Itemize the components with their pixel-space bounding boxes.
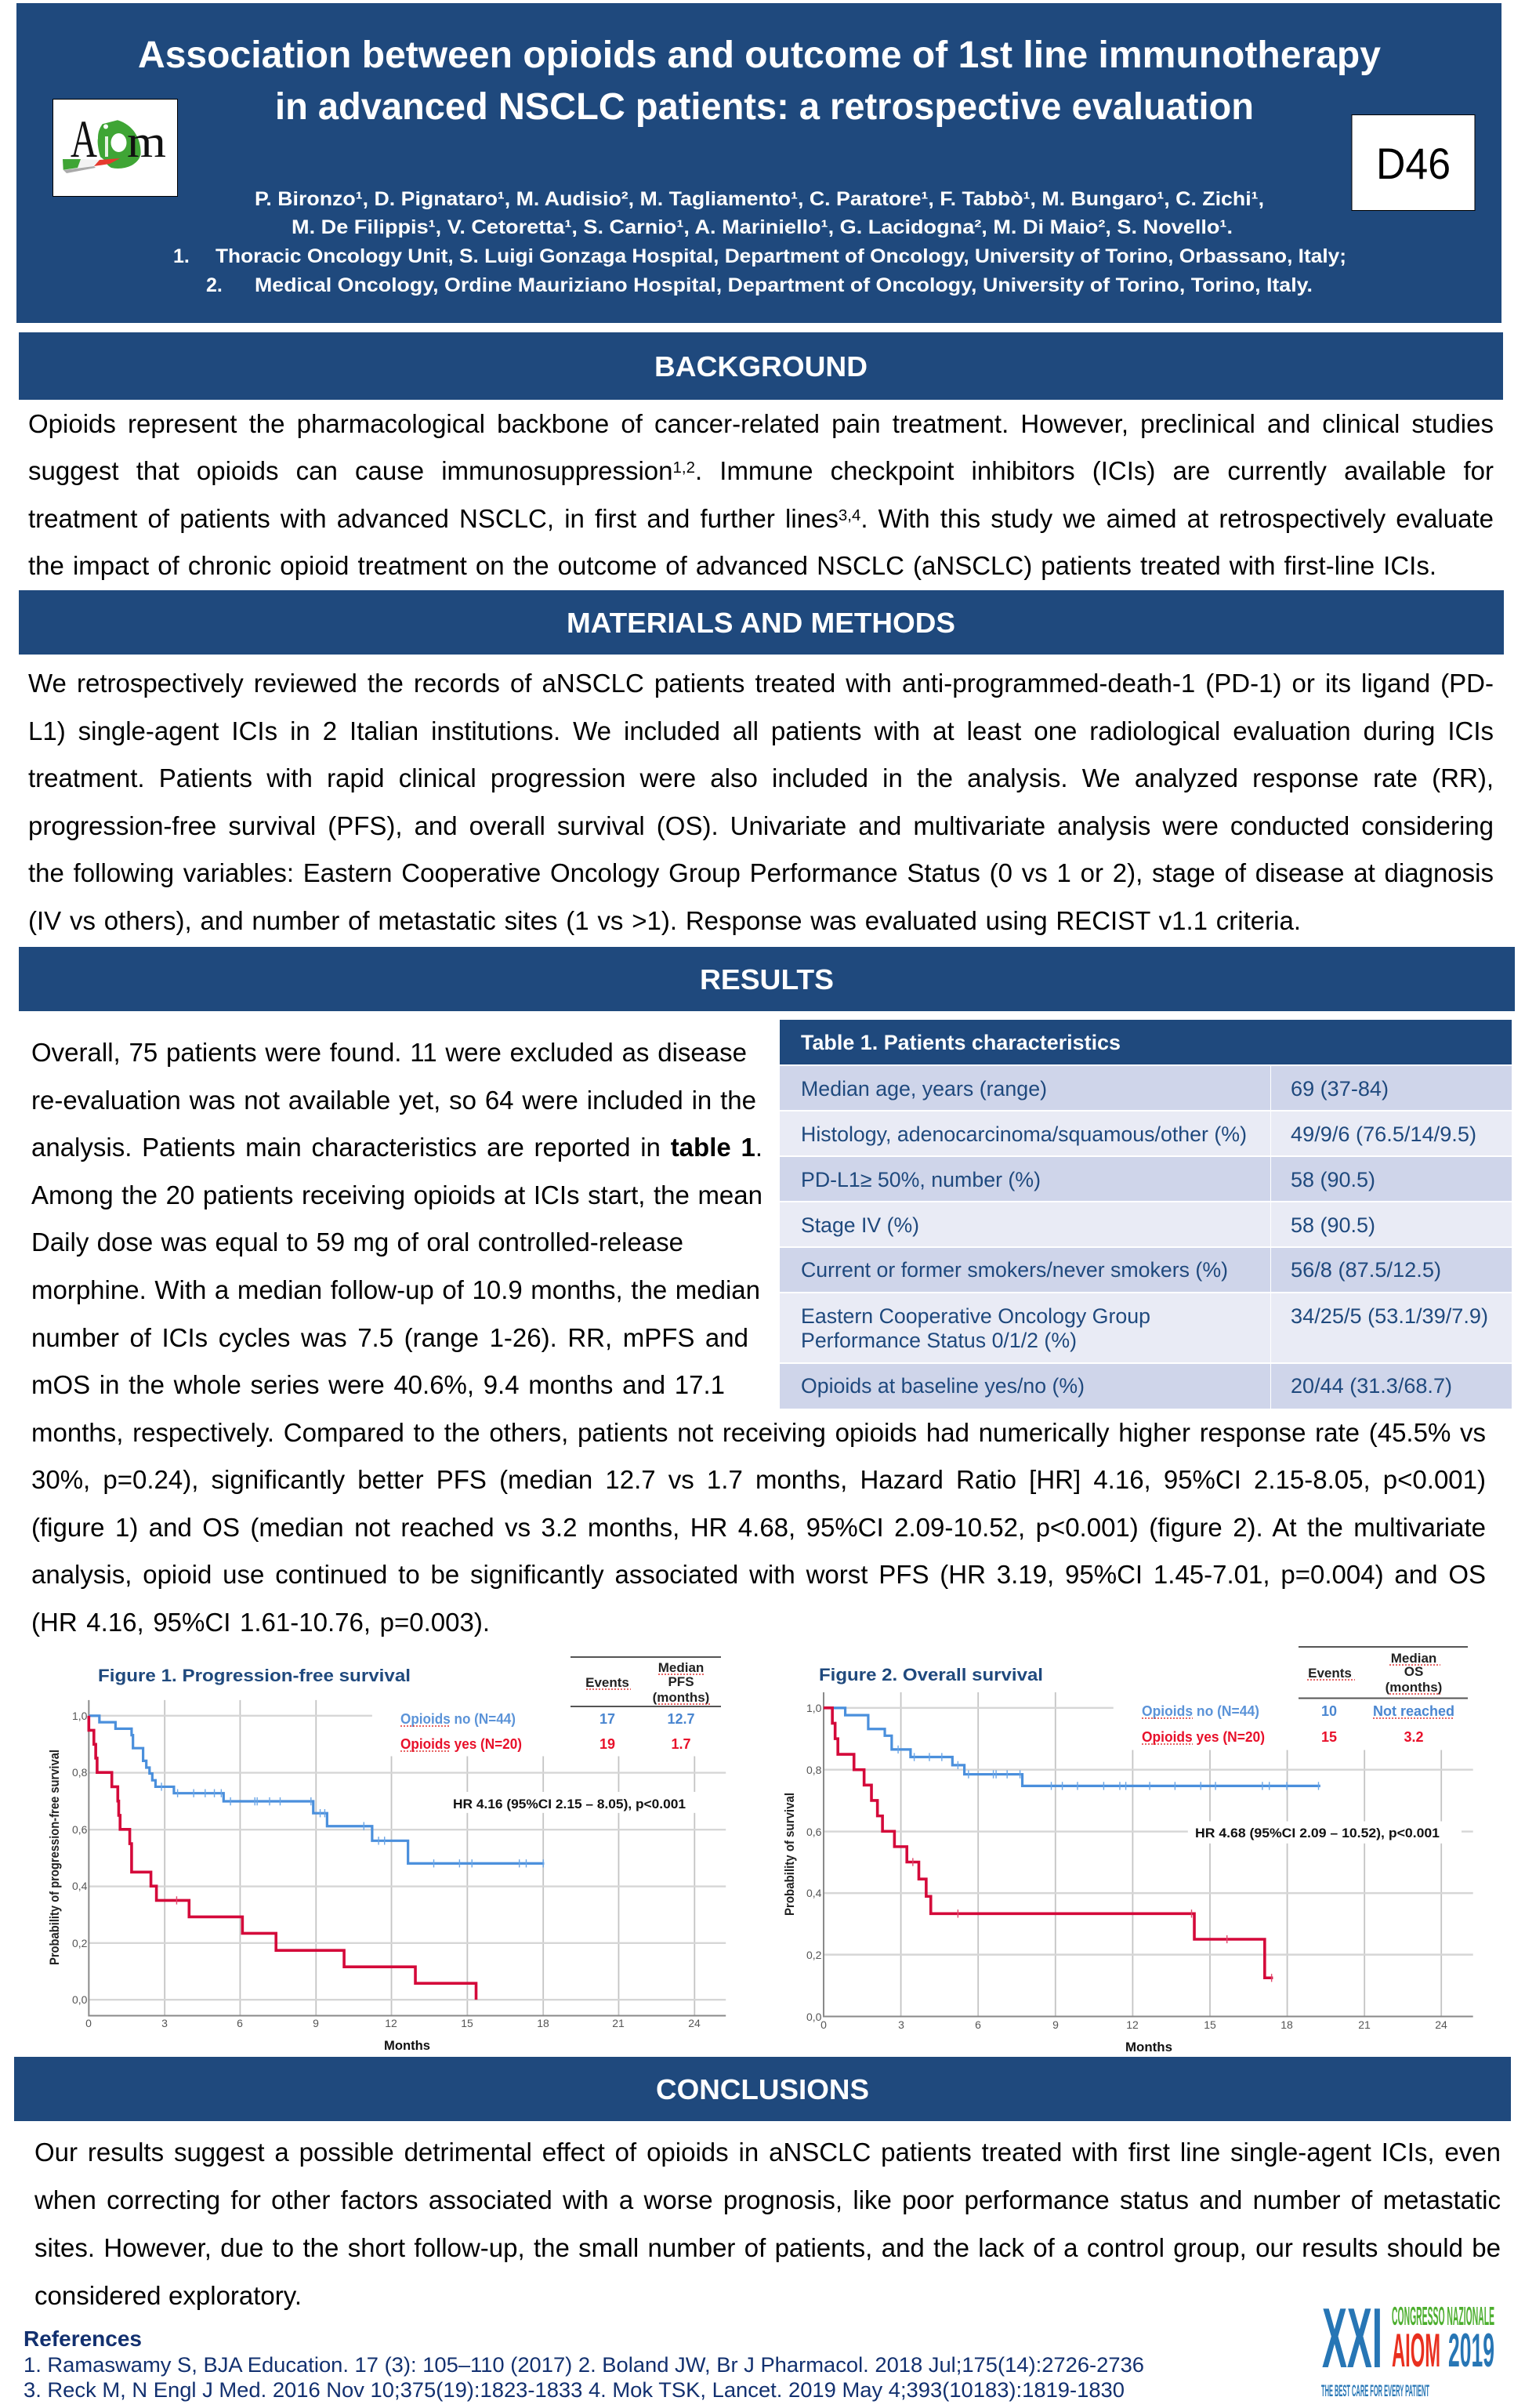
chart 1 axis labels: Months — [384, 2038, 430, 2053]
text block: conclusions: when correcting for other factors associated with a worse prognosis, like poor performance status and number of metastatic — [34, 2185, 1501, 2214]
icon: AIOM logo: A — [71, 109, 97, 169]
table: patients characteristics: 58 (90.5) — [1291, 1168, 1375, 1191]
chart 2 legend table: Events — [1308, 1666, 1352, 1681]
table: patients characteristics: 69 (37-84) — [1291, 1077, 1389, 1101]
text block: results: morphine. With a median follow-up of 10.9 months, the median — [31, 1275, 760, 1304]
chart 2 axis labels: 21 — [1358, 2018, 1371, 2031]
chart 2 axis labels: 0 — [820, 2018, 827, 2031]
chart 1 axis labels: Probability of progression-free survival — [47, 1750, 62, 1965]
table: patients characteristics: Opioids at baseline yes/no (%) — [801, 1374, 1085, 1398]
text block: materials and methods: L1) single-agent ICIs in 2 Italian institutions. We included all patients with at least one radiological evaluation during ICIs — [28, 716, 1494, 745]
heading: materials and methods: MATERIALS AND METHODS — [567, 607, 955, 639]
text block: results: (HR 4.16, 95%CI 1.61-10.76, p=0.003). — [31, 1608, 490, 1637]
text block: conclusions: sites. However, due to the short follow-up, the small number of patients, and the lack of a control group, our results should be — [34, 2233, 1501, 2262]
text block: materials and methods: the following variables: Eastern Cooperative Oncology Group Performance Status (0 vs 1 or 2), stage of disease at diagnosis — [28, 858, 1494, 887]
text block: materials and methods: treatment. Patients with rapid clinical progression were also included in the analysis. We analyzed response rate (RR), — [28, 763, 1494, 792]
references: 1. Ramaswamy S, BJA Education. 17 (3): 105–110 (2017) 2. Boland JW, Br J Pharmacol. 2018 Jul;175(14):2726-2736 — [24, 2353, 1144, 2377]
title: in advanced NSCLC patients: a retrospective evaluation — [275, 86, 1254, 128]
text block: results: Daily dose was equal to 59 mg of oral controlled-release — [31, 1228, 683, 1257]
chart 2 axis labels: 0,0 — [806, 2011, 822, 2023]
chart 2 axis labels — [782, 1702, 1447, 2054]
table: patients characteristics: 56/8 (87.5/12.5) — [1291, 1258, 1441, 1282]
text block: materials and methods: We retrospectively reviewed the records of aNSCLC patients treated with anti-programmed-death-1 (PD-1) or its ligand (PD- — [28, 669, 1494, 698]
references: 3. Reck M, N Engl J Med. 2016 Nov 10;375(19):1823-1833 4. Mok TSK, Lancet. 2019 May 4;393(10183):1819-1830 — [24, 2378, 1125, 2402]
text block: background: suggest that opioids can cause immunosuppression1,2. Immune checkpoint inhibitors (ICIs) are currently available for — [28, 456, 1494, 485]
table: patients characteristics: 20/44 (31.3/68.7) — [1291, 1374, 1452, 1398]
heading: conclusions: CONCLUSIONS — [656, 2073, 869, 2105]
text block: results: analysis. Patients main characteristics are reported in table 1. — [31, 1133, 762, 1162]
chart 2 heading: Figure 2. Overall survival — [819, 1665, 1043, 1685]
references: References — [24, 2326, 142, 2351]
chart 2 axis labels: 0,6 — [806, 1826, 822, 1838]
chart 1 axis labels: 12 — [385, 2017, 397, 2029]
title: Association between opioids and outcome of 1st line immunotherapy — [138, 34, 1381, 76]
chart 1 plot — [89, 1697, 736, 2015]
chart 1 axis labels: 0,4 — [72, 1880, 88, 1892]
table: patients characteristics: 58 (90.5) — [1291, 1213, 1375, 1237]
chart 1 axis labels: 3 — [161, 2017, 168, 2029]
chart 2 legend table: 3.2 — [1404, 1729, 1424, 1745]
heading: background: BACKGROUND — [654, 350, 868, 383]
chart 1 legend table: 1.7 — [671, 1736, 691, 1752]
text block: materials and methods — [28, 669, 1494, 935]
chart 1 axis labels: 0 — [85, 2017, 92, 2029]
table: patients characteristics: Current or former smokers/never smokers (%) — [801, 1258, 1228, 1282]
chart 2 axis labels: 0,2 — [806, 1949, 822, 1961]
chart 1 axis labels: 24 — [688, 2017, 701, 2029]
icon: XXI congresso nazionale AIOM 2019 logo — [1321, 2290, 1494, 2400]
chart 1 legend table: 12.7 — [667, 1711, 695, 1727]
chart 1 legend table: Opioids no (N=44) — [400, 1711, 516, 1727]
header banner — [16, 3, 1501, 323]
chart 2 axis labels: Probability of survival — [782, 1793, 797, 1916]
chart 1 legend table: 17 — [599, 1711, 615, 1727]
text block: results: number of ICIs cycles was 7.5 (range 1-26). RR, mPFS and — [31, 1323, 748, 1352]
title — [138, 34, 1381, 128]
icon: XXI congresso nazionale AIOM 2019 logo: XXI — [1322, 2290, 1382, 2386]
chart 1 legend table: Events — [585, 1675, 629, 1690]
table: patients characteristics: PD-L1≥ 50%, number (%) — [801, 1168, 1041, 1191]
text block: results: Among the 20 patients receiving opioids at ICIs start, the mean — [31, 1180, 762, 1209]
badge: D46: D46 — [1376, 139, 1451, 188]
chart 2 legend table — [1142, 1647, 1468, 1745]
text block: results — [31, 1038, 1486, 1637]
text block: results: mOS in the whole series were 40.6%, 9.4 months and 17.1 — [31, 1370, 725, 1399]
text block: results: re-evaluation was not available yet, so 64 were included in the — [31, 1086, 756, 1115]
chart 1 legend table: Opioids yes (N=20) — [400, 1736, 522, 1752]
heading: conclusions — [14, 2057, 1511, 2121]
authors and affiliations: M. De Filippis¹, V. Cetoretta¹, S. Carnio¹, A. Mariniello¹, G. Lacidogna², M. Di Maio², S. Novello¹. — [292, 216, 1233, 238]
text block: results: (figure 1) and OS (median not reached vs 3.2 months, HR 4.68, 95%CI 2.09-10.52, p<0.001) (figure 2). At the multivariate — [31, 1513, 1486, 1542]
chart: figure 1 progression-free survival — [47, 1657, 736, 2053]
chart 2 plot — [824, 1689, 1476, 2017]
chart 1 axis labels: 0,2 — [72, 1937, 88, 1949]
table: patients characteristics: Histology, adenocarcinoma/squamous/other (%) — [801, 1122, 1247, 1146]
chart 1 axis labels: 9 — [313, 2017, 319, 2029]
badge: D46 — [1352, 114, 1475, 210]
chart: figure 2 overall survival — [782, 1647, 1476, 2054]
chart 1 axis labels: 15 — [461, 2017, 473, 2029]
chart 2 axis labels: 12 — [1126, 2018, 1139, 2031]
chart 2 axis labels: 3 — [898, 2018, 904, 2031]
chart 2 legend table: 15 — [1321, 1729, 1337, 1745]
text block: results: 30%, p=0.24), significantly better PFS (median 12.7 vs 1.7 months, Hazard Ratio [HR] 4.16, 95%CI 2.15-8.05, p<0.001) — [31, 1465, 1486, 1494]
table: patients characteristics: Median age, years (range) — [801, 1077, 1047, 1101]
authors and affiliations: 1. — [173, 245, 190, 267]
table: patients characteristics: Eastern Cooperative Oncology Group — [801, 1304, 1150, 1328]
authors and affiliations: P. Bironzo¹, D. Pignataro¹, M. Audisio², M. Tagliamento¹, C. Paratore¹, F. Tabbò¹, M. Bungaro¹, C. Zichi¹, — [255, 188, 1264, 210]
chart 2 legend table: Median — [1391, 1651, 1436, 1666]
text block: background — [28, 409, 1494, 580]
chart 1 legend table — [400, 1657, 721, 1752]
text block: results: Overall, 75 patients were found. 11 were excluded as disease — [31, 1038, 747, 1067]
chart 2 legend table: OS — [1404, 1664, 1423, 1679]
chart 2 legend table: 10 — [1321, 1703, 1337, 1719]
icon: AIOM logo: m — [127, 116, 166, 167]
chart 2 axis labels: 18 — [1280, 2018, 1293, 2031]
chart 1 axis labels: 6 — [237, 2017, 243, 2029]
text block: conclusions: Our results suggest a possible detrimental effect of opioids in aNSCLC patients treated with first line single-agent ICIs, even — [34, 2138, 1501, 2167]
chart 2 axis labels: 9 — [1052, 2018, 1059, 2031]
text block: materials and methods: progression-free survival (PFS), and overall survival (OS). Univariate and multivariate analysis were conducted considering — [28, 811, 1494, 840]
chart 1 axis labels: 1,0 — [72, 1710, 88, 1722]
chart 2 axis labels: 24 — [1435, 2018, 1447, 2031]
chart 1 legend table: Median — [658, 1660, 704, 1675]
chart 2 legend table: Not reached — [1373, 1703, 1454, 1719]
table: patients characteristics: Stage IV (%) — [801, 1213, 919, 1237]
authors and affiliations: 2. — [206, 274, 223, 296]
chart 1 heading: Figure 1. Progression-free survival — [98, 1666, 411, 1685]
chart 1 legend table: PFS — [668, 1674, 694, 1689]
heading: results — [19, 947, 1515, 1011]
icon: AIOM logo — [53, 99, 177, 196]
heading: background — [19, 332, 1503, 400]
chart 1 axis labels: 0,6 — [72, 1823, 88, 1836]
table: patients characteristics: Table 1. Patients characteristics — [801, 1031, 1121, 1054]
chart 2 axis labels: 0,4 — [806, 1887, 822, 1899]
chart 2 axis labels: 15 — [1204, 2018, 1216, 2031]
chart 2 legend table: Opioids yes (N=20) — [1142, 1729, 1265, 1745]
heading: materials and methods — [19, 590, 1504, 655]
text block: conclusions: considered exploratory. — [34, 2281, 302, 2310]
authors and affiliations: Thoracic Oncology Unit, S. Luigi Gonzaga Hospital, Department of Oncology, University of Torino, Orbassano, Italy; — [216, 245, 1346, 267]
chart 2 axis labels: 0,8 — [806, 1764, 822, 1776]
chart 2 axis labels: 6 — [975, 2018, 981, 2031]
table: patients characteristics: Performance Status 0/1/2 (%) — [801, 1329, 1077, 1352]
chart 2 legend table: Opioids no (N=44) — [1142, 1703, 1259, 1719]
chart 1 axis labels: 0,8 — [72, 1766, 88, 1779]
icon: XXI congresso nazionale AIOM 2019 logo: AIOM — [1392, 2324, 1440, 2377]
chart 2 legend table: (months) — [1386, 1680, 1442, 1695]
chart 1 axis labels: 0,0 — [72, 1993, 88, 2006]
text block: background: Opioids represent the pharmacological backbone of cancer-related pain treatment. However, preclinical and clinical studies — [28, 409, 1494, 438]
chart 1 axis labels: 18 — [537, 2017, 549, 2029]
authors and affiliations: Medical Oncology, Ordine Mauriziano Hospital, Department of Oncology, University of Torino, Torino, Italy. — [255, 274, 1313, 296]
references — [24, 2326, 1144, 2402]
authors and affiliations — [173, 188, 1346, 296]
chart 1 legend table: (months) — [653, 1690, 709, 1705]
chart 1 axis labels — [47, 1710, 701, 2053]
chart 1 legend table: 19 — [599, 1736, 615, 1752]
chart 2 axis labels: 1,0 — [806, 1702, 822, 1714]
chart 1 hazard ratio note: HR 4.16 (95%CI 2.15 – 8.05), p<0.001 — [453, 1797, 686, 1811]
text block: background: the impact of chronic opioid treatment on the outcome of advanced NSCLC (aNSCLC) patients treated with first-line ICIs. — [28, 551, 1436, 580]
text block: materials and methods: (IV vs others), and number of metastatic sites (1 vs >1). Response was evaluated using RECIST v1.1 criteria. — [28, 906, 1301, 935]
text block: background: treatment of patients with advanced NSCLC, in first and further lines3,4. With this study we aimed at retrospectively evaluate — [28, 504, 1494, 533]
chart 2 axis labels: Months — [1125, 2040, 1172, 2054]
table: patients characteristics: 49/9/6 (76.5/14/9.5) — [1291, 1122, 1476, 1146]
text block: results: analysis, opioid use continued to be significantly associated with worst PFS (HR 3.19, 95%CI 1.45-7.01, p=0.004) and OS — [31, 1560, 1486, 1589]
table: patients characteristics: 34/25/5 (53.1/39/7.9) — [1291, 1304, 1488, 1328]
text block: results: months, respectively. Compared to the others, patients not receiving opioids had numerically higher response rate (45.5% vs — [31, 1418, 1486, 1447]
heading: results: RESULTS — [700, 963, 834, 995]
chart 2 hazard ratio note: HR 4.68 (95%CI 2.09 – 10.52), p<0.001 — [1195, 1826, 1440, 1840]
chart 1 axis labels: 21 — [612, 2017, 625, 2029]
text block: conclusions — [34, 2138, 1501, 2310]
table: patients characteristics — [780, 1020, 1512, 1409]
